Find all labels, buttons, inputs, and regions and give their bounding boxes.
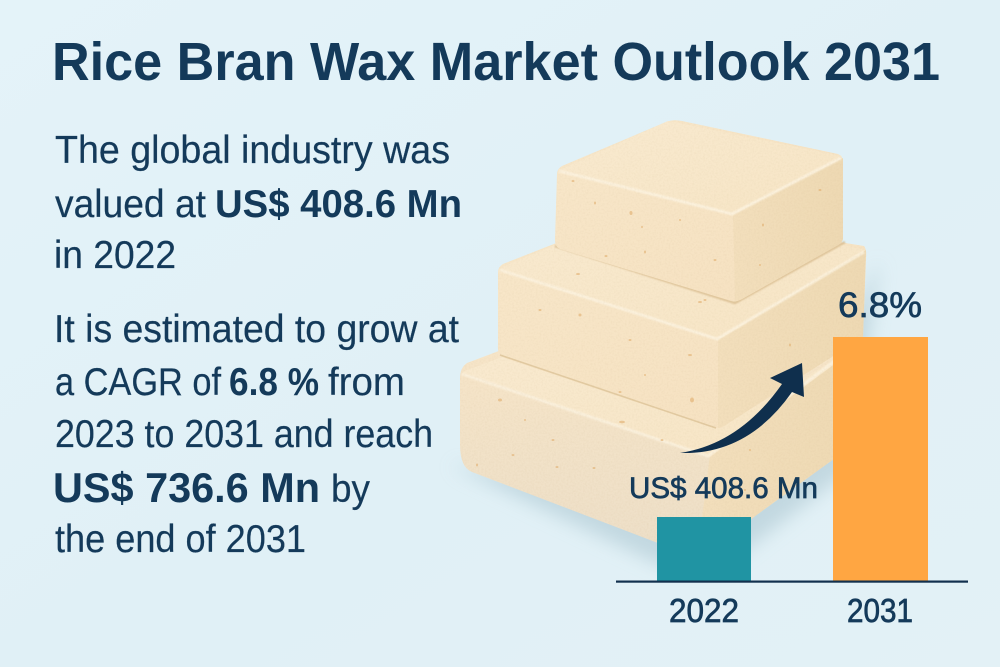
- text block: 2022 valuation: valued at: [55, 183, 206, 226]
- text block: 2022 valuation: US$ 408.6 Mn: [215, 183, 462, 226]
- text block: growth forecast: 2023 to 2031 and reach: [55, 413, 433, 456]
- wax speckles: [476, 180, 822, 491]
- text block: growth forecast: 6.8 %: [229, 361, 319, 404]
- text block: 2022 valuation: [54, 129, 462, 277]
- growth arrow: [680, 363, 804, 453]
- illustration: stacked wax blocks: [450, 120, 880, 570]
- bar: 2031: [833, 337, 928, 581]
- text block: growth forecast: It is estimated to grow at: [54, 308, 459, 351]
- text block: 2022 valuation: in 2022: [54, 234, 176, 277]
- label: year 2022: 2022: [669, 592, 739, 629]
- bottom block: [460, 340, 860, 557]
- chart axis: [616, 580, 968, 583]
- bar: 2022: [657, 517, 751, 581]
- top block: [555, 120, 843, 301]
- text block: growth forecast: from: [328, 361, 405, 404]
- middle block: [498, 205, 866, 428]
- text block: growth forecast: a CAGR of: [55, 361, 221, 404]
- text block: growth forecast: US$ 736.6 Mn: [53, 464, 320, 511]
- title: Rice Bran Wax Market Outlook 2031: [52, 32, 940, 92]
- label: CAGR: 6.8%: [838, 286, 922, 325]
- text block: growth forecast: [53, 308, 459, 561]
- text block: 2022 valuation: The global industry was: [55, 129, 450, 172]
- label: 2022 value: US$ 408.6 Mn: [629, 472, 818, 505]
- contact shadow under top block: [555, 242, 845, 303]
- label: year 2031: 2031: [847, 592, 913, 629]
- text block: growth forecast: by: [331, 468, 370, 511]
- text block: growth forecast: the end of 2031: [55, 518, 306, 561]
